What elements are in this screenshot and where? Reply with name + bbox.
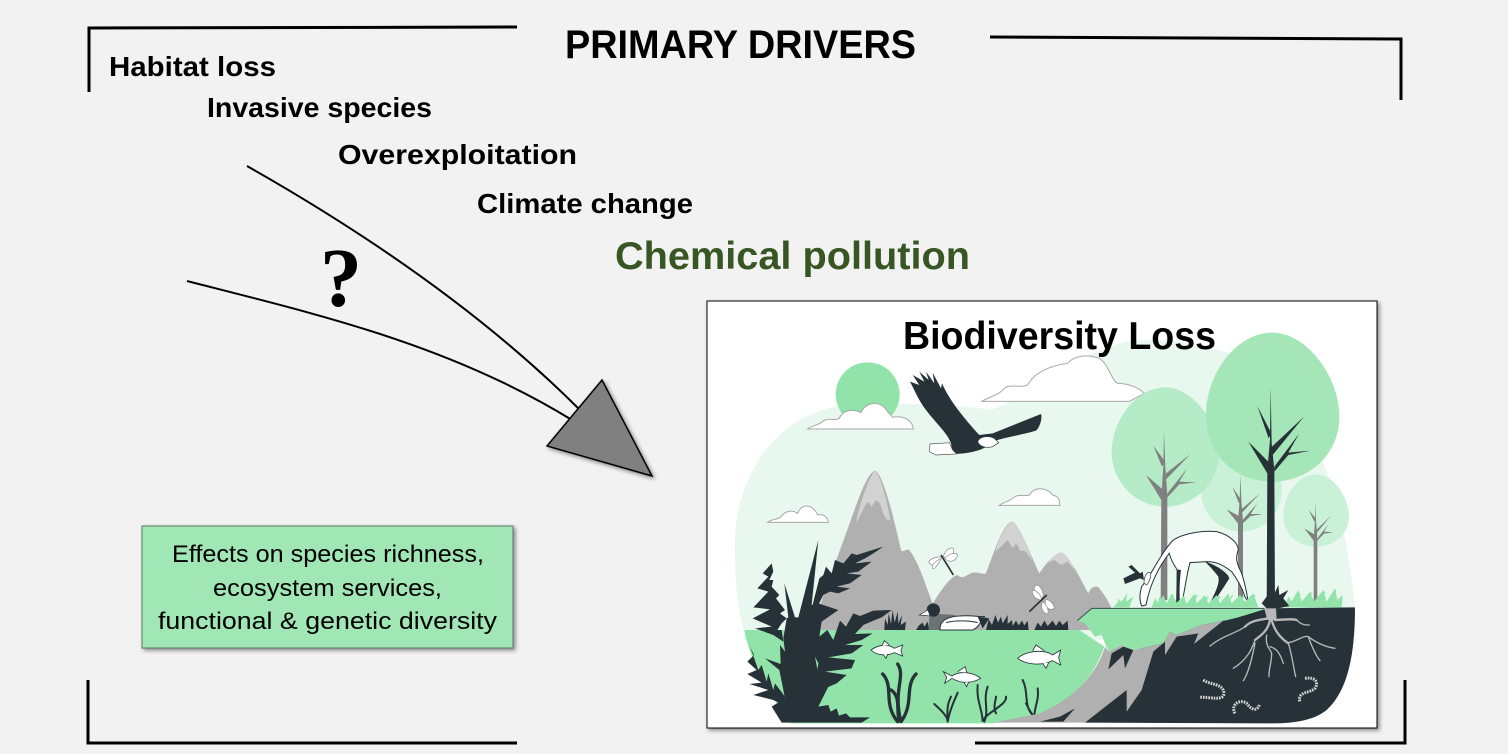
question mark: ?	[320, 232, 362, 325]
driver: habitat loss: Habitat loss	[109, 51, 276, 82]
title: PRIMARY DRIVERS	[565, 23, 916, 67]
dragonfly	[929, 548, 958, 575]
duck	[919, 603, 989, 630]
fern plant	[747, 540, 892, 723]
soil cracks	[1040, 647, 1133, 722]
reeds	[884, 610, 1068, 630]
right scene	[993, 333, 1355, 723]
callout: effects: Effects on species richness,	[172, 541, 484, 568]
dragonfly	[1029, 585, 1054, 614]
driver: overexploitation: Overexploitation	[338, 139, 577, 170]
soil	[1085, 607, 1355, 723]
bank rock	[993, 621, 1223, 723]
landscape background	[735, 340, 1355, 640]
ground line	[1077, 608, 1267, 621]
cloud: small	[999, 489, 1060, 505]
callout: effects	[142, 526, 513, 648]
mountains	[811, 471, 1112, 630]
left scene	[744, 356, 1144, 723]
panel heading: Biodiversity Loss	[903, 315, 1216, 358]
fish	[1018, 645, 1061, 668]
cloud: left	[768, 506, 828, 522]
worms	[1199, 678, 1317, 713]
seaweed	[883, 664, 1038, 722]
arrow: drivers to biodiversity loss	[187, 166, 652, 476]
trees	[1112, 333, 1349, 608]
callout: effects: functional & genetic diversity	[158, 608, 497, 635]
fish	[943, 667, 981, 687]
cloud: large	[982, 356, 1144, 401]
eagle	[910, 372, 1041, 455]
roots	[1210, 608, 1335, 681]
deer	[1123, 531, 1248, 606]
fish	[871, 641, 903, 658]
callout: effects: ecosystem services,	[213, 575, 442, 602]
driver: invasive species: Invasive species	[207, 92, 432, 123]
driver: climate change: Climate change	[477, 188, 693, 219]
panel: biodiversity loss	[707, 301, 1377, 728]
central tuft	[1262, 585, 1289, 608]
sun	[836, 362, 900, 426]
cloud: sun	[808, 404, 913, 429]
driver list	[109, 51, 970, 278]
water	[744, 630, 1104, 723]
green bank	[1077, 608, 1267, 652]
grass	[1113, 588, 1343, 607]
driver: chemical pollution: Chemical pollution	[615, 235, 970, 278]
